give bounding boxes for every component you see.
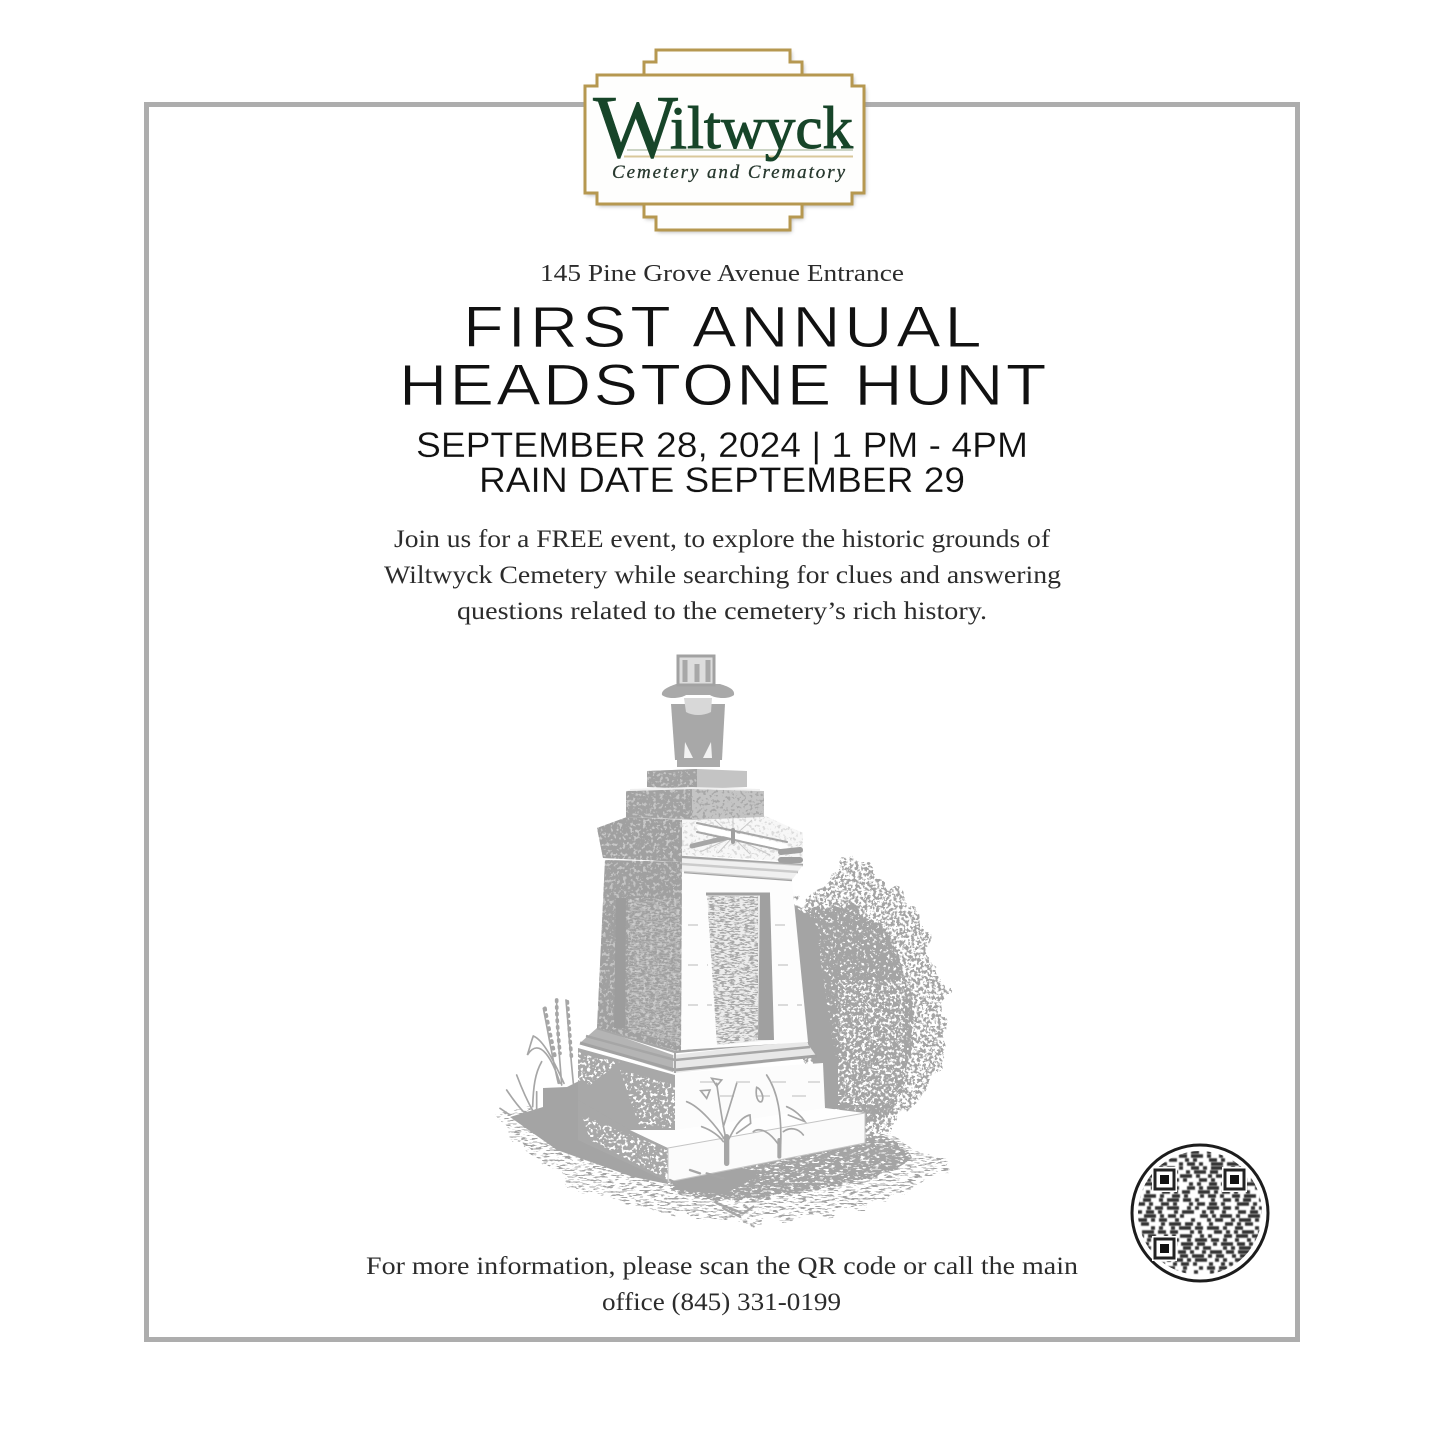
flower plant	[687, 1078, 751, 1163]
poster	[144, 48, 1300, 1342]
monument cap	[597, 815, 803, 880]
monument shaft	[597, 860, 808, 1052]
plinth moulding	[580, 1028, 817, 1073]
logo: Wiltwyck Cemetery and Crematory: iltwyck	[670, 95, 853, 161]
title: HEADSTONE HUNT	[399, 353, 1046, 418]
footer contact text: office (845) 331-0199	[602, 1287, 841, 1316]
title	[399, 295, 1046, 418]
stepped tiers	[626, 769, 764, 820]
logo: Wiltwyck Cemetery and Crematory	[585, 50, 866, 232]
footer contact text: For more information, please scan the QR code or call the main	[366, 1251, 1078, 1280]
qr finder: top right	[1222, 1167, 1247, 1192]
event description: questions related to the cemetery’s rich history.	[457, 596, 987, 625]
logo: Wiltwyck Cemetery and Crematory: W	[593, 78, 678, 177]
event description: Join us for a FREE event, to explore the historic grounds of	[394, 524, 1051, 553]
date and rain date: SEPTEMBER 28, 2024 | 1 PM - 4PM	[416, 426, 1028, 465]
urn finial	[662, 656, 734, 767]
plant at left	[500, 1000, 573, 1115]
front grass strokes	[670, 1148, 890, 1217]
qr finder: top left	[1152, 1167, 1177, 1192]
qr modules	[1131, 1152, 1265, 1272]
stepped base	[578, 1048, 865, 1182]
footer contact text	[366, 1251, 1078, 1316]
title: FIRST ANNUAL	[463, 295, 982, 360]
qr finder: bottom left	[1152, 1236, 1177, 1261]
inscription panel	[706, 893, 774, 1045]
ground and grass	[495, 1062, 945, 1222]
address line: 145 Pine Grove Avenue Entrance	[540, 261, 904, 287]
logo: Wiltwyck Cemetery and Crematory: Cemetery and Crematory	[612, 162, 846, 183]
date and rain date	[416, 426, 1028, 500]
wildflowers and grasses	[500, 1000, 890, 1217]
bush	[792, 858, 945, 1141]
drooping plant	[753, 1075, 805, 1157]
event description	[384, 524, 1061, 625]
monument illustration	[495, 656, 945, 1222]
event description: Wiltwyck Cemetery while searching for clues and answering	[384, 560, 1061, 589]
crossed torch and tools	[692, 823, 800, 860]
date and rain date: RAIN DATE SEPTEMBER 29	[479, 461, 965, 500]
qr code	[1131, 1145, 1268, 1281]
page frame	[146, 104, 1298, 1340]
left shaft face	[597, 860, 682, 1052]
